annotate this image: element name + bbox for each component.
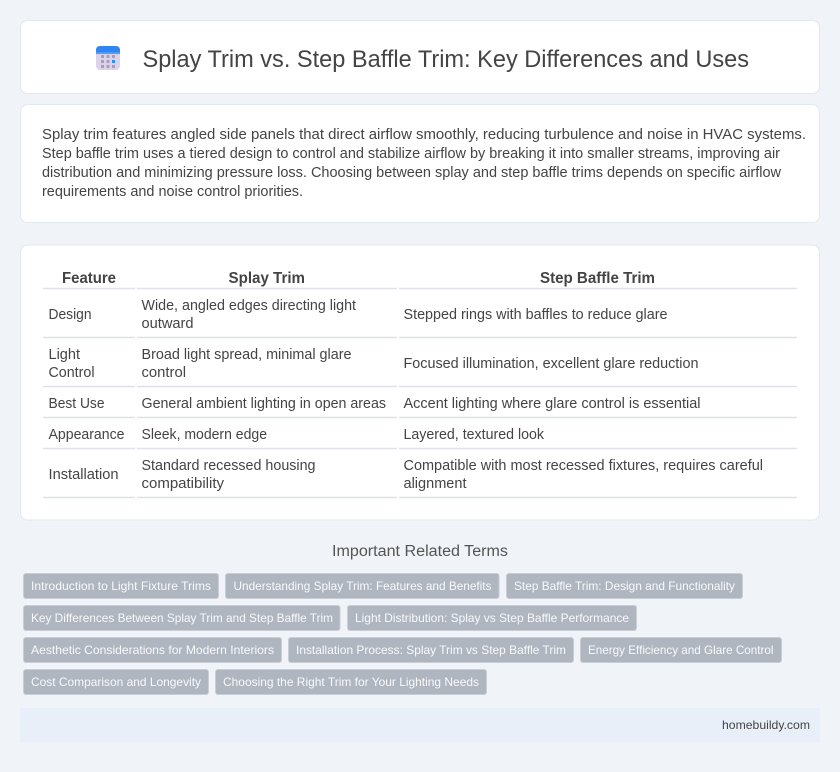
row: light control: Light: [48, 347, 80, 363]
panel: comparison table: [20, 245, 820, 520]
row: best use: General ambient lighting in open areas: [142, 396, 386, 412]
tag: [24, 638, 282, 662]
tag: Choosing the Right Trim for Your Lighting Needs: [223, 675, 479, 689]
intro paragraph: distribution and minimizing pressure loss. Choosing between splay and step baffle trims depends on specific airflow: [42, 165, 782, 181]
intro paragraph: requirements and noise control priorities.: [42, 184, 303, 200]
tag: Understanding Splay Trim: Features and Benefits: [234, 579, 492, 593]
tag: Step Baffle Trim: Design and Functionality: [514, 579, 735, 593]
row: design: [48, 298, 668, 332]
row: best use: Best Use: [48, 396, 104, 412]
tag: Aesthetic Considerations for Modern Interiors: [31, 643, 274, 657]
tag: Key Differences Between Splay Trim and Step Baffle Trim: [31, 611, 333, 625]
intro paragraph: [42, 127, 806, 200]
row: light control: Broad light spread, minimal glare: [142, 347, 352, 363]
row: appearance: Appearance: [48, 427, 124, 443]
row: appearance: Layered, textured look: [404, 427, 545, 443]
row: best use: Accent lighting where glare control is essential: [404, 396, 700, 412]
row: installation: compatibility: [142, 476, 225, 492]
table header row: Feature: [62, 270, 116, 287]
row: design: outward: [142, 316, 194, 332]
panel: related term tags: [24, 574, 782, 694]
tag: [24, 574, 218, 598]
footer site name: homebuildy.com: [722, 718, 810, 732]
table header row: Splay Trim: [228, 270, 305, 287]
tag: [24, 670, 208, 694]
row: installation: alignment: [404, 476, 466, 492]
row: design: Wide, angled edges directing light: [142, 298, 356, 314]
footer: [20, 708, 820, 742]
row: appearance: [48, 427, 545, 443]
row: light control: Focused illumination, excellent glare reduction: [404, 356, 698, 372]
tag: Light Distribution: Splay vs Step Baffle Performance: [355, 611, 629, 625]
row: installation: Installation: [48, 467, 118, 483]
tag: [226, 574, 499, 598]
table header row: Step Baffle Trim: [540, 270, 655, 287]
row: design: Design: [48, 307, 92, 323]
row: best use: [48, 396, 700, 412]
heading: important related terms: Important Related Terms: [332, 543, 508, 560]
tag: Introduction to Light Fixture Trims: [31, 579, 211, 593]
tag: Installation Process: Splay Trim vs Step Baffle Trim: [296, 643, 566, 657]
row: light control: Control: [48, 365, 94, 381]
tag: [348, 606, 636, 630]
intro paragraph: Splay trim features angled side panels that direct airflow smoothly, reducing turbulence and noise in HVAC systems.: [42, 127, 806, 143]
row: installation: Standard recessed housing: [142, 458, 316, 474]
title: Splay Trim vs. Step Baffle Trim: Key Differences and Uses: [142, 46, 749, 73]
row: design: Stepped rings with baffles to reduce glare: [404, 307, 668, 323]
tag: Cost Comparison and Longevity: [31, 675, 201, 689]
panel: header: [20, 20, 820, 94]
row: light control: control: [142, 365, 186, 381]
row: installation: Compatible with most recessed fixtures, requires careful: [404, 458, 763, 474]
row: installation: [48, 458, 763, 492]
table header row: [62, 270, 655, 287]
icon: calendar: [96, 46, 120, 70]
tag: [506, 574, 742, 598]
tag: [24, 606, 340, 630]
tag: [580, 638, 782, 662]
tag: [288, 638, 574, 662]
row: light control: [48, 347, 698, 381]
panel: introduction: [20, 104, 820, 222]
row: appearance: Sleek, modern edge: [142, 427, 267, 443]
tag: Energy Efficiency and Glare Control: [588, 643, 774, 657]
tag: [216, 670, 486, 694]
intro paragraph: Step baffle trim uses a tiered design to control and stabilize airflow by breaking it into smaller streams, improving air: [42, 146, 780, 162]
